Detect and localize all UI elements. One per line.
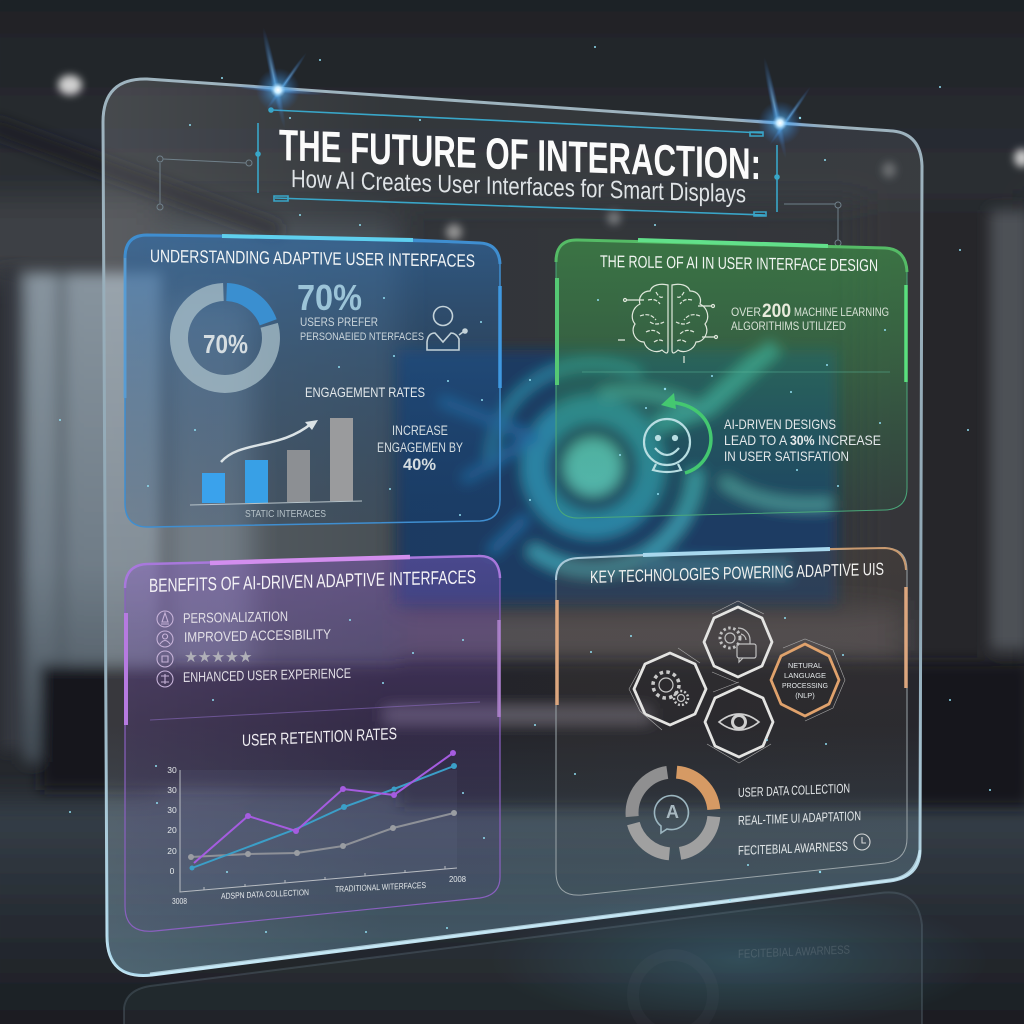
- heading: engagement rates: ENGAGEMENT RATES: [305, 384, 425, 400]
- title block: [157, 108, 841, 246]
- icon: brain: [618, 284, 718, 363]
- heading: retention: USER RETENTION RATES: [242, 725, 397, 750]
- line chart: 30: [167, 785, 177, 795]
- subtitle: How AI Creates User Interfaces for Smart Displays: [291, 165, 746, 208]
- stat: 70% users prefer: [297, 277, 424, 343]
- floating particles: [59, 46, 991, 933]
- hex: eye: [705, 682, 773, 763]
- heading: KEY TECHNOLOGIES POWERING ADAPTIVE UIS: [590, 559, 884, 587]
- ceiling lights: [58, 75, 1024, 240]
- title frame lines: [256, 108, 779, 216]
- icon: smiley with cycle arrow: [644, 393, 711, 473]
- stat: 70% users prefer: PERSONAEIED NTERFACES: [300, 331, 424, 343]
- line chart: 0: [170, 866, 175, 876]
- line chart: 3008: [172, 896, 187, 906]
- benefits list: PERSONALIZATION: [183, 608, 288, 626]
- icon: clock: [854, 834, 870, 850]
- hexagon icon cluster: [629, 601, 845, 763]
- glass reflection on floor: [124, 892, 922, 1024]
- stat: machine learning algorithms: ALGORITHIMS UTILIZED: [731, 319, 846, 333]
- stat: increase engagement: [377, 423, 463, 474]
- line chart: ADSPN DATA COLLECTION: [221, 887, 309, 901]
- donut chart 70%: [179, 292, 271, 384]
- benefits list: IMPROVED ACCESIBILITY: [184, 626, 332, 645]
- floor glow: [490, 890, 990, 1024]
- benefits list: ENHANCED USER EXPERIENCE: [183, 665, 351, 685]
- technology list: [738, 781, 870, 858]
- line chart: TRADITIONAL WITERFACES: [335, 880, 426, 894]
- heading: BENEFITS OF AI-DRIVEN ADAPTIVE INTERFACES: [149, 567, 476, 597]
- benefits list: [157, 608, 351, 687]
- glass display panel: [103, 79, 922, 976]
- stat: 70% users prefer: USERS PREFER: [300, 315, 378, 329]
- hex: natural language processing: NETURAL: [788, 661, 822, 670]
- stat: machine learning algorithms: MACHINE LEARNING: [794, 305, 889, 319]
- light flares: [230, 26, 828, 160]
- hex: natural language processing: LANGUAGE: [784, 671, 826, 680]
- hex: gears: [629, 648, 706, 730]
- donut chart 70%: 70%: [203, 329, 248, 359]
- stat: machine learning algorithms: OVER: [731, 305, 761, 319]
- hex: natural language processing: PROCESSING: [782, 681, 828, 690]
- panel: understanding adaptive user interfaces: [125, 235, 500, 527]
- hex: natural language processing: (NLP): [795, 691, 815, 700]
- arrow: [221, 420, 318, 462]
- stat: 30% satisfaction: [724, 416, 881, 464]
- panel: role of AI: [556, 240, 907, 518]
- technology list: FECITEBIAL AWARNESS: [738, 839, 848, 858]
- hex: gear and lock: [704, 601, 772, 683]
- cycle diagram: [632, 772, 714, 854]
- stat: 30% satisfaction: IN USER SATISFATION: [724, 448, 849, 464]
- stat: increase engagement: 40%: [403, 455, 436, 474]
- stat: machine learning algorithms: 200: [762, 301, 791, 322]
- icon: user: [427, 306, 467, 350]
- icon: speech bubble: A: [666, 802, 679, 822]
- line chart: 30: [167, 765, 177, 775]
- line chart: [167, 750, 466, 906]
- bar chart: STATIC INTERACES: [245, 509, 326, 520]
- stat: 70% users prefer: 70%: [297, 277, 362, 318]
- panel: key technologies: [556, 548, 907, 895]
- stat: 30% satisfaction: AI-DRIVEN DESIGNS: [724, 416, 836, 432]
- main title: THE FUTURE OF INTERACTION:: [279, 121, 761, 189]
- line chart: 20: [167, 825, 177, 835]
- hex: natural language processing: [771, 639, 845, 721]
- glass reflection on floor: FECITEBIAL AWARNESS: [738, 943, 850, 961]
- heading: THE ROLE OF AI IN USER INTERFACE DESIGN: [600, 252, 878, 275]
- line chart: 20: [167, 846, 177, 856]
- stat: increase engagement: INCREASE: [392, 423, 448, 438]
- line chart: 30: [167, 805, 177, 815]
- stat: 30% satisfaction: LEAD TO A 30% INCREASE: [724, 432, 881, 448]
- wall display artwork: [397, 345, 837, 604]
- stat: increase engagement: ENGAGEMEN BY: [377, 440, 463, 455]
- panel: benefits: [125, 556, 500, 931]
- heading: UNDERSTANDING ADAPTIVE USER INTERFACES: [150, 246, 475, 271]
- line chart: 2008: [449, 874, 466, 884]
- benefits list: ★★★★★: [184, 649, 253, 666]
- technology list: USER DATA COLLECTION: [738, 781, 850, 800]
- technology list: REAL-TIME UI ADAPTATION: [738, 808, 861, 828]
- stat: machine learning algorithms: [731, 301, 889, 333]
- bar chart: [190, 418, 362, 520]
